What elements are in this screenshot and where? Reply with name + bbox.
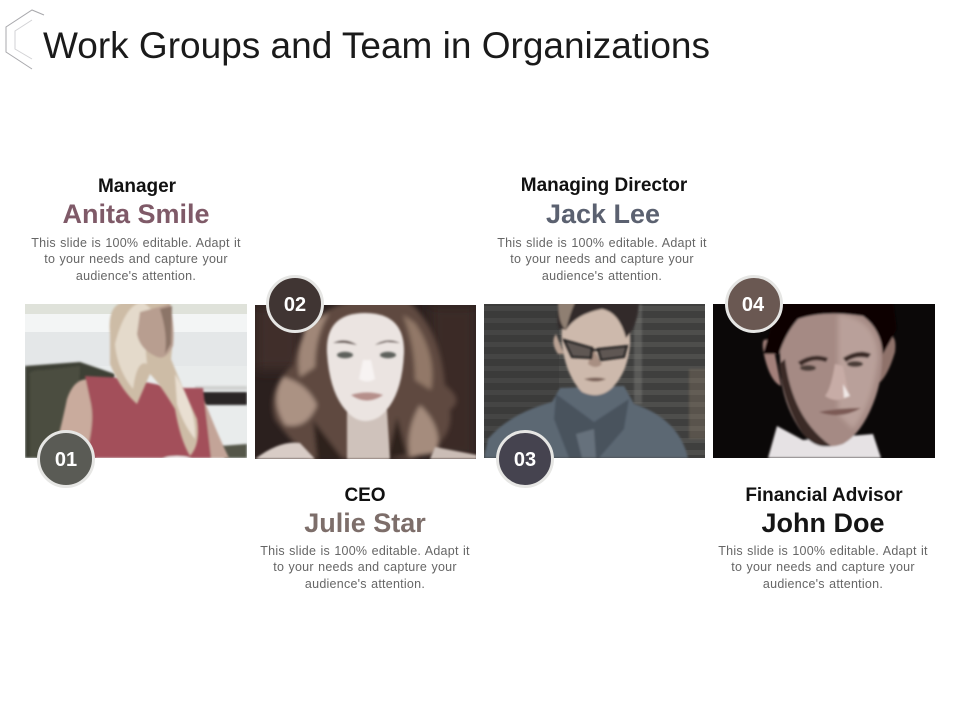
badge: 02 — [268, 276, 322, 332]
badge: 01 — [38, 432, 94, 486]
panel: CEO text — [260, 485, 470, 591]
badge: 04 — [726, 276, 782, 332]
icon: glasses — [564, 340, 627, 360]
photo: Anita Smile — [25, 302, 247, 462]
badge: 04: 04 — [742, 294, 765, 316]
panel: financial advisor text: audience's attention. — [763, 577, 883, 591]
badge: 02: 02 — [284, 294, 306, 316]
panel: manager text: audience's attention. — [76, 269, 196, 283]
panel: managing director text: Managing Director — [521, 175, 688, 196]
panel: managing director text: to your needs and capture your — [510, 252, 694, 266]
panel: CEO text: Julie Star — [304, 508, 426, 538]
panel: financial advisor text: Financial Advisor — [745, 485, 903, 506]
panel: financial advisor text — [718, 485, 928, 591]
panel: CEO text: This slide is 100% editable. Adapt it — [260, 544, 470, 558]
icon: hexagon outline — [6, 10, 44, 69]
photo: Julie Star — [255, 299, 477, 459]
panel: financial advisor text: John Doe — [761, 508, 885, 538]
badge: 03 — [498, 432, 552, 486]
panel: manager text — [31, 176, 241, 283]
panel: managing director text: audience's attention. — [542, 269, 662, 283]
panel: CEO text: audience's attention. — [305, 577, 425, 591]
panel: CEO text: CEO — [344, 485, 386, 506]
panel: financial advisor text: This slide is 100% editable. Adapt it — [718, 544, 928, 558]
photo: John Doe — [713, 300, 935, 458]
badge: 01: 01 — [55, 449, 77, 471]
panel: managing director text — [497, 175, 707, 283]
panel: managing director text: Jack Lee — [546, 199, 660, 229]
panel: financial advisor text: to your needs and capture your — [731, 560, 915, 574]
panel: manager text: Manager — [98, 176, 177, 197]
photo: Jack Lee — [484, 300, 706, 458]
panel: manager text: Anita Smile — [62, 199, 210, 229]
panel: manager text: to your needs and capture your — [44, 252, 228, 266]
badge: 03: 03 — [514, 449, 536, 471]
title: Work Groups and Team in Organizations — [43, 25, 710, 66]
panel: manager text: This slide is 100% editable. Adapt it — [31, 236, 241, 250]
panel: CEO text: to your needs and capture your — [273, 560, 457, 574]
panel: managing director text: This slide is 100% editable. Adapt it — [497, 236, 707, 250]
